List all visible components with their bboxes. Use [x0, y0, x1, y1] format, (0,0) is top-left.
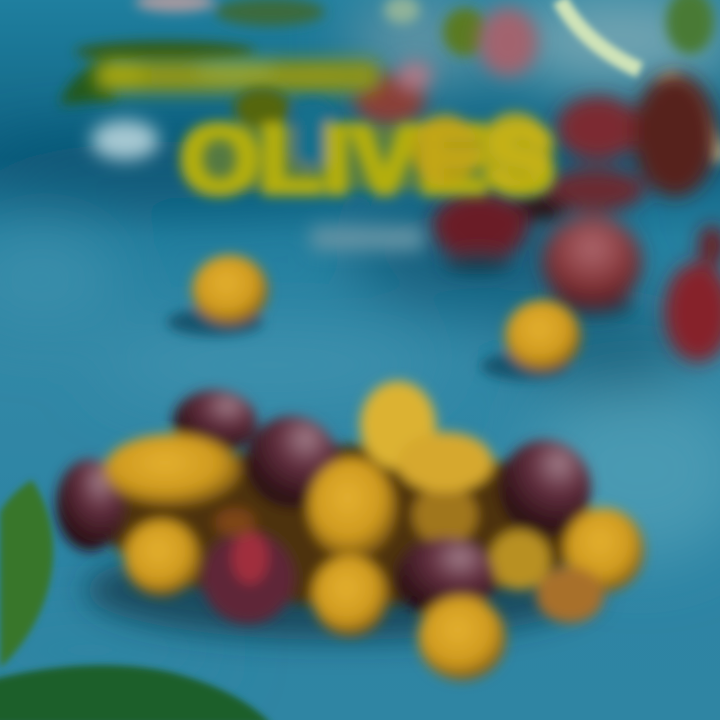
heading strip: yellow subtitle bar: Nutritional Benefits of [95, 65, 381, 92]
leaf: lower left vertical [0, 480, 53, 668]
olive: red lower left [202, 532, 294, 624]
olive pile shadow [85, 540, 595, 640]
leaf: bottom left horizontal [0, 665, 272, 720]
olive: yellow bottom centre [312, 556, 388, 636]
olive: orange behind red [215, 508, 255, 536]
olive: yellow top right [397, 432, 493, 492]
branch: blurred olive leaves and stems at top [60, 0, 720, 160]
olive: plum bottom [395, 538, 495, 618]
olive: gold front [418, 596, 506, 680]
olive: plum top [173, 390, 257, 454]
olive pile: group of yellow and plum olives [56, 381, 644, 680]
pile underlay [105, 445, 595, 605]
olive: yellow centre [308, 458, 396, 558]
single olive: left [167, 255, 268, 336]
label: pale blurred word: the [95, 129, 131, 156]
upper right plum olives [354, 8, 720, 362]
olive: orange lower right [536, 567, 604, 623]
olive: plum right [499, 440, 591, 536]
olive: yellow far right [564, 508, 644, 592]
olive: yellow tall top [360, 381, 436, 469]
olive: long yellow left [104, 434, 240, 506]
olive: plum centre [246, 416, 338, 508]
single olive: right [481, 300, 581, 380]
caption: faint blurred line: health facts [310, 231, 425, 252]
label: pale blurred word [91, 120, 159, 160]
olive: plum far left [56, 459, 124, 551]
title: OLIVES: OLIVES [180, 106, 555, 213]
olive: yellow left [124, 520, 200, 596]
olive: yellow small right [490, 530, 550, 590]
olive: mid yellow back [413, 485, 477, 545]
stem: pale curved stalk [560, 0, 640, 70]
olive highlight: red [232, 532, 268, 584]
